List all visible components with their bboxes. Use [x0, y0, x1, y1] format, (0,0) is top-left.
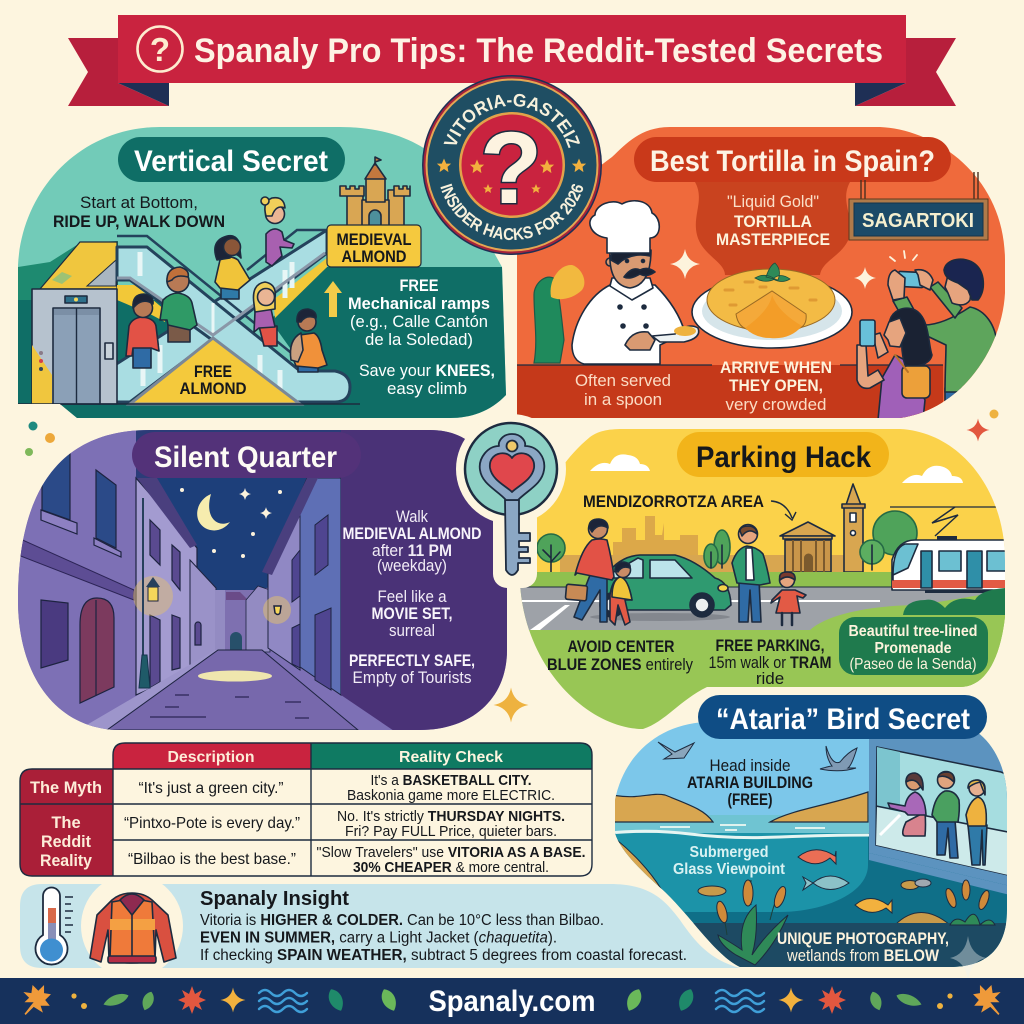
bushes	[903, 588, 1010, 615]
reality cells: 30% CHEAPER & more central.	[353, 859, 549, 876]
window frame	[869, 720, 1010, 895]
person: woman in yellow	[215, 236, 250, 299]
text: head inside: Head inside	[710, 757, 790, 775]
decoration: gold sparkle	[494, 688, 528, 722]
promenade grass	[810, 590, 1010, 700]
text: walk medieval almond	[342, 508, 482, 575]
text: avoid center	[547, 637, 693, 674]
people on escalators	[126, 197, 327, 372]
birds	[658, 742, 694, 759]
text: mechanical ramps: (e.g., Calle Cantón	[350, 312, 488, 331]
panel: parking hack	[515, 425, 1012, 742]
person: child in red	[126, 294, 159, 368]
text: liquid gold: "Liquid Gold"	[727, 192, 819, 211]
row labels	[30, 779, 102, 870]
text: perfectly safe: Empty of Tourists	[352, 669, 472, 687]
trees	[537, 511, 917, 578]
label: mendizorrotza area: MENDIZORROTZA AREA	[583, 492, 764, 511]
moon	[197, 494, 230, 530]
badge: vitoria-gasteiz	[422, 75, 602, 255]
icon: thermometer	[36, 888, 73, 965]
row labels: Reddit	[41, 833, 91, 851]
text: free parking: FREE PARKING,	[716, 636, 824, 655]
text: unique photography	[777, 930, 949, 965]
icon: key	[456, 414, 566, 588]
person: boy with backpack	[290, 309, 327, 372]
text: arrive when they open: very crowded	[726, 395, 826, 414]
text: avoid center: AVOID CENTER	[568, 637, 674, 656]
icon: tram	[890, 507, 1012, 593]
text: free parking	[708, 636, 832, 688]
site name: Spanaly.com	[428, 985, 596, 1018]
text: free parking: ride	[756, 669, 784, 688]
yellow structures	[40, 242, 117, 289]
right buildings	[300, 478, 342, 696]
text: walk medieval almond: MEDIEVAL ALMOND	[342, 525, 482, 543]
panel: spanaly insight	[20, 874, 740, 978]
text: mechanical ramps: FREE	[400, 276, 438, 295]
text: free parking: 15m walk or TRAM	[708, 653, 832, 672]
triangle: free almond	[130, 338, 300, 404]
text: ride up walk down: Start at Bottom,	[80, 194, 198, 212]
text: movie set: Feel like a	[378, 588, 447, 606]
person: man in green	[160, 267, 197, 342]
sign: medieval almond: MEDIEVAL	[336, 231, 412, 249]
panel: vertical secret	[18, 127, 506, 418]
text: submerged viewpoint	[673, 844, 786, 878]
table: myth vs reality	[20, 743, 592, 876]
text: mechanical ramps: easy climb	[387, 379, 467, 398]
footer icons right	[623, 985, 1001, 1015]
people: father with child	[565, 519, 632, 625]
icon: elevator	[32, 289, 117, 404]
illustration: man taking photo	[888, 251, 997, 420]
hill	[770, 792, 868, 822]
heading: vertical secret	[118, 137, 345, 182]
text: ride up walk down	[53, 194, 225, 231]
sign: medieval almond: ALMOND	[342, 248, 407, 266]
icon: question mark circle: ?	[150, 31, 170, 68]
decoration: right dot	[990, 410, 998, 418]
heading: best tortilla	[634, 137, 951, 182]
callout: promenade: Promenade	[874, 640, 952, 657]
heading: silent quarter	[132, 432, 361, 478]
illustration: woman with phone	[857, 308, 932, 420]
heading: ataria	[698, 695, 987, 739]
text: head inside: ATARIA BUILDING	[687, 774, 813, 792]
reality cells: Baskonia game more ELECTRIC.	[347, 787, 555, 804]
decoration: red star	[966, 418, 990, 442]
heading: silent quarter: Silent Quarter	[154, 441, 337, 474]
icon: jacket	[90, 893, 176, 963]
text: mechanical ramps	[348, 276, 495, 398]
title banner	[68, 15, 956, 106]
hills	[612, 794, 713, 822]
text: liquid gold: TORTILLA	[734, 212, 812, 231]
illustration: escalators	[116, 228, 352, 404]
underwater	[610, 833, 1010, 973]
panel: best tortilla	[510, 120, 1010, 420]
description cells	[124, 780, 300, 868]
cloud	[902, 466, 963, 483]
reality cells: "Slow Travelers" use VITORIA AS A BASE.	[316, 844, 586, 861]
insight text: If checking SPAIN WEATHER, subtract 5 degrees from coastal forecast.	[200, 947, 687, 964]
road	[88, 650, 216, 730]
bottom band	[690, 923, 1010, 970]
arrow: up	[324, 281, 342, 317]
table headers: Description	[168, 749, 254, 766]
person: girl in purple and red	[253, 282, 277, 346]
heading: best tortilla: Best Tortilla in Spain?	[650, 145, 935, 178]
sparkle	[670, 249, 700, 279]
road	[515, 587, 1010, 630]
text: arrive when they open: THEY OPEN,	[729, 376, 823, 395]
panel: silent quarter	[0, 425, 520, 735]
left bank	[612, 836, 663, 892]
arrow	[771, 501, 796, 520]
triangle: free almond: FREE	[194, 363, 232, 381]
table headers	[168, 749, 503, 766]
row labels: The Myth	[30, 779, 102, 797]
insight text	[200, 888, 687, 964]
reality cells: Fri? Pay FULL Price, quieter bars.	[345, 823, 557, 840]
footer bar	[0, 978, 1024, 1024]
text: unique photography: UNIQUE PHOTOGRAPHY,	[777, 930, 949, 948]
text area	[341, 428, 510, 735]
watermark sparkle	[950, 936, 986, 980]
callout: promenade: Beautiful tree-lined	[848, 623, 978, 640]
insight text: Vitoria is HIGHER & COLDER. Can be 10°C less than Bilbao.	[200, 912, 604, 929]
text: mechanical ramps: Mechanical ramps	[348, 294, 490, 313]
steam blob	[695, 182, 850, 275]
table headers: Reality Check	[399, 749, 503, 766]
sign: sagartoki	[849, 172, 988, 240]
text: often served: Often served	[575, 371, 671, 390]
people: father with girl	[732, 524, 806, 625]
icon: temple	[780, 522, 835, 572]
text: submerged viewpoint: Glass Viewpoint	[673, 861, 786, 878]
water surface	[610, 815, 1010, 835]
row labels: The	[51, 814, 81, 832]
sparkle	[854, 267, 876, 289]
triangle: free almond: ALMOND	[180, 380, 247, 398]
fish	[798, 850, 892, 913]
skyline	[613, 516, 698, 555]
bird	[820, 746, 857, 771]
heading: parking hack: Parking Hack	[696, 441, 871, 474]
description cells: “It's just a green city.”	[138, 780, 284, 797]
reeds	[715, 880, 995, 965]
clouds	[590, 454, 650, 471]
icon: clock tower	[842, 484, 865, 572]
stars	[180, 488, 282, 558]
icon: castle	[340, 157, 410, 226]
car	[600, 555, 731, 617]
insight text: Spanaly Insight	[200, 888, 349, 910]
text: liquid gold: MASTERPIECE	[716, 230, 830, 249]
night sky	[157, 478, 306, 590]
jacket circle	[81, 874, 183, 978]
stars	[437, 158, 586, 193]
text: perfectly safe	[349, 652, 475, 687]
footer icons left	[23, 985, 400, 1015]
text: walk medieval almond: (weekday)	[377, 557, 447, 575]
label: mendizorrotza area	[583, 492, 796, 520]
text: mechanical ramps: Save your KNEES,	[359, 361, 495, 380]
text: ride up walk down: RIDE UP, WALK DOWN	[53, 213, 225, 231]
badge: vitoria-gasteiz: INSIDER HACKS FOR 2026	[440, 184, 584, 240]
text: movie set: MOVIE SET,	[372, 605, 452, 623]
grass strip	[530, 572, 891, 586]
reality cells: No. It's strictly THURSDAY NIGHTS.	[337, 808, 565, 825]
text: often served: in a spoon	[584, 390, 662, 409]
illustration: chef	[572, 201, 699, 364]
icon: lamp post statue	[534, 265, 584, 363]
rocks	[698, 879, 950, 925]
badge: vitoria-gasteiz: ?	[480, 111, 542, 225]
heading: parking hack	[677, 432, 889, 477]
insight text: EVEN IN SUMMER, carry a Light Jacket (chaquetita).	[200, 930, 557, 946]
decoration: left dots	[25, 422, 55, 456]
sign: medieval almond	[327, 225, 421, 267]
badge: vitoria-gasteiz: VITORIA-GASTEIZ	[444, 94, 580, 148]
text: head inside: (FREE)	[728, 791, 772, 809]
lamp post and lamps	[133, 498, 291, 688]
sign: sagartoki: SAGARTOKI	[862, 210, 974, 232]
heading: ataria: “Ataria” Bird Secret	[716, 703, 970, 736]
text: submerged viewpoint: Submerged	[690, 844, 768, 861]
icon: question mark circle	[138, 26, 182, 72]
icon: tortilla on plate	[692, 263, 852, 348]
text: unique photography: wetlands from BELOW	[786, 947, 939, 965]
text: walk medieval almond: after 11 PM	[372, 542, 452, 560]
title: Spanaly Pro Tips: The Reddit-Tested Secrets	[194, 32, 883, 70]
text: mechanical ramps: de la Soledad)	[365, 330, 473, 349]
person: woman in purple	[261, 197, 294, 266]
text: liquid gold	[716, 192, 830, 249]
text: movie set	[372, 588, 452, 640]
heading: vertical secret: Vertical Secret	[134, 145, 328, 178]
text: arrive when they open: ARRIVE WHEN	[720, 358, 832, 377]
row labels: Reality	[40, 852, 93, 870]
panel: ataria	[610, 715, 1010, 973]
description cells: “Bilbao is the best base.”	[128, 851, 296, 868]
callout: promenade: (Paseo de la Senda)	[850, 656, 976, 673]
reality cells	[316, 772, 586, 876]
windows	[41, 450, 201, 703]
people in window	[888, 772, 987, 865]
text: avoid center: BLUE ZONES entirely	[547, 655, 693, 674]
description cells: “Pintxo-Pote is every day.”	[124, 815, 300, 832]
callout: promenade	[839, 617, 988, 675]
left buildings	[18, 428, 136, 730]
reality cells: It's a BASKETBALL CITY.	[370, 772, 532, 789]
text: arrive when they open	[720, 358, 832, 414]
text: movie set: surreal	[389, 622, 435, 640]
text: head inside	[687, 757, 813, 809]
text: often served	[575, 371, 671, 409]
text: perfectly safe: PERFECTLY SAFE,	[349, 652, 475, 670]
text: walk medieval almond: Walk	[396, 508, 429, 526]
